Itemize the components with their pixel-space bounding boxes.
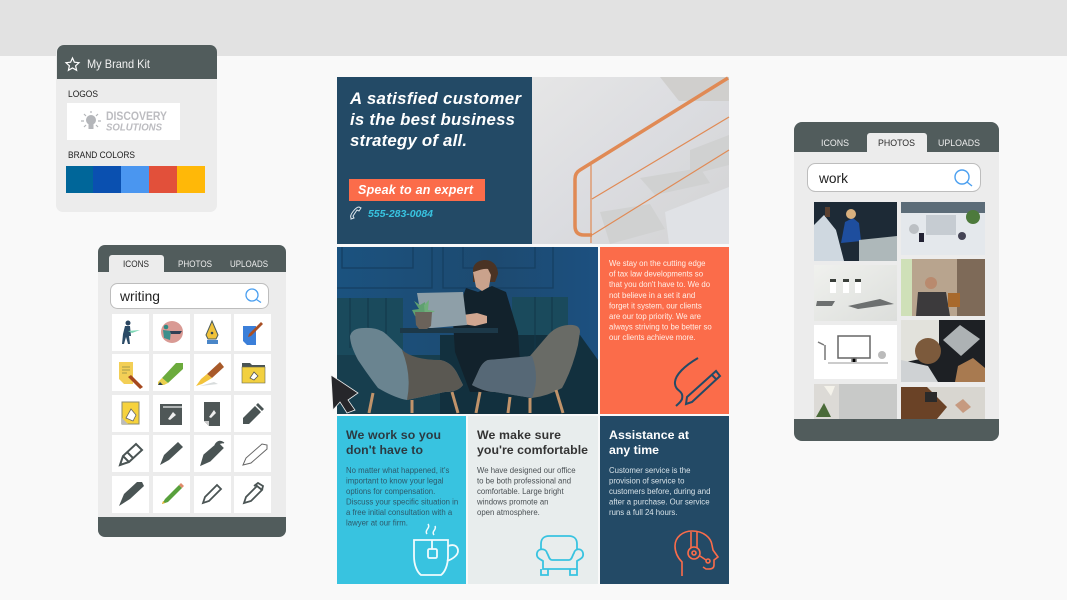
button: speak to an expert: Speak to an expert [358,183,474,197]
icon: green marker [158,363,183,385]
body text [346,466,458,528]
panel: photos search [794,122,999,441]
active tab: photos [867,133,927,152]
icon: dark folder [160,404,182,425]
icon: blue document pencil [243,322,263,345]
heading [477,428,588,457]
photo: man with laptop [337,247,598,414]
photo: man at wood desk [901,259,985,316]
icon: pink circle desk [161,321,183,343]
cursor arrow [331,375,358,413]
icon: pen [201,441,224,465]
icon: dark document [204,402,220,426]
body text: We have designed our office [477,466,576,475]
panel: hero navy [337,77,532,244]
tab labels: PHOTOS [878,138,915,149]
panel: we make sure [468,416,598,584]
icon: outline pencil 2 [203,485,221,503]
phone number: 555-283-0084 [368,208,433,220]
icon: yellow document pencil [119,362,143,389]
search box: writing: writing [119,288,160,304]
icon: outline pen [243,444,267,465]
left chair [350,328,463,413]
brand colors label: BRAND COLORS [68,150,135,160]
photo: desk from above [901,202,985,255]
tab labels: UPLOADS [938,138,980,149]
right chair [472,325,580,413]
panel: assistance at any time [600,416,729,584]
orange paragraph: always striving to be better so [609,323,712,332]
laptop [417,292,467,328]
brand kit header [57,45,217,79]
icon: person writing [122,320,140,344]
body text: provision of service to [609,476,685,486]
logo: discovery solutions: SOLUTIONS [106,122,162,134]
orange paragraph: are our top priority. We are [609,312,701,321]
active tab: icons [109,255,164,272]
body text: No matter what happened, it's [346,466,449,475]
photos panel footer [794,419,999,441]
body text: important to know your legal [346,476,444,486]
logo: discovery solutions [67,103,180,140]
photo: woman at messy desk [901,387,985,419]
body text: to be both professional and [477,476,571,486]
heading: don't have to [346,443,423,457]
icons panel header [98,245,286,272]
icon tile grid [112,314,271,513]
icon: fountain pen [196,362,224,386]
body text: after a purchase. Our service [609,498,710,506]
panel: my brand kit [56,45,217,212]
top band [0,0,1067,56]
icon: yellow folder [242,363,265,383]
icon: solid pen 2 [119,482,144,506]
photo: office team [814,202,897,261]
orange paragraph: that you don't have to. We do [609,280,711,289]
photo: monitor on white [814,325,897,379]
orange paragraph: We stay on the cutting edge [609,259,706,268]
hero headline [349,89,522,150]
icon: green pencil [162,483,184,504]
photo: staircase [532,77,729,244]
body text: lawyer at our firm. [346,518,408,528]
search box: work [808,164,980,192]
panel: we work so you [337,416,466,584]
tab labels: UPLOADS [230,259,268,269]
photo: woman stressed at laptop [901,320,985,382]
brand color swatches [66,166,205,193]
icons panel footer [98,517,286,537]
stair rail [575,78,729,243]
photo: plant and lamp [814,384,897,419]
body text: customers before, during and [609,487,710,496]
icon: headset head [675,531,718,576]
body text: a free initial consultation with a [346,508,453,517]
orange paragraph: of tax law developments so [609,270,704,279]
icon: pen nib [206,321,218,344]
icon: solid pencil 2 [160,442,183,465]
heading: you're comfortable [477,443,588,457]
icon: outline pen clip [244,483,263,503]
orange paragraph: forget it system, our clients [609,301,702,310]
orange paragraph: not believe in a set it and [609,291,695,300]
man [453,260,520,392]
wall panels [337,247,553,288]
icon: telephone [351,207,361,219]
tab labels: PHOTOS [178,259,212,269]
icon: armchair [537,536,583,575]
hero headline: strategy of all. [350,131,467,150]
hero headline: A satisfied customer [349,89,522,108]
body text: Customer service is the [609,466,690,475]
search box: writing [110,284,268,308]
table [400,328,498,333]
heading [346,428,441,457]
body text: windows promote an [476,498,549,506]
logo: discovery solutions: DISCOVERY [106,109,167,123]
icon: solid pencil [243,403,264,424]
tab labels: ICONS [821,138,849,149]
body text: comfortable. Large bright [477,487,565,496]
body text: runs a full 24 hours. [609,508,677,517]
tab labels: ICONS [123,259,149,269]
panel: icons search [98,245,286,537]
body text: Discuss your specific situation in [346,498,458,506]
photo: white shelf [814,265,897,321]
orange paragraph [609,259,712,342]
heading: any time [609,443,659,457]
icon: star [66,58,79,70]
heading: We work so you [346,428,441,442]
orange paragraph: our clients achieve more. [609,333,696,342]
heading [609,428,689,457]
body text: options for compensation. [346,487,435,496]
tab labels [821,138,980,149]
button: speak to an expert [349,179,485,201]
heading: We make sure [477,428,561,442]
heading: Assistance at [609,428,689,442]
plant [412,300,435,329]
photos panel header [794,122,999,152]
brand kit title: My Brand Kit [87,57,151,71]
tab labels [123,259,268,269]
icon: tea cup [414,524,458,575]
body text [609,466,710,517]
logos label: LOGOS [68,89,98,99]
hero headline: is the best business [350,110,515,129]
bench [337,297,568,357]
panel: orange tax text [600,247,729,414]
body text [476,466,576,517]
body text: open atmosphere. [477,508,540,517]
icon: yellow page [122,402,139,424]
icon: pen squiggle [675,358,720,406]
search box: work: work [818,170,849,186]
icon: outline pencil [120,444,142,465]
